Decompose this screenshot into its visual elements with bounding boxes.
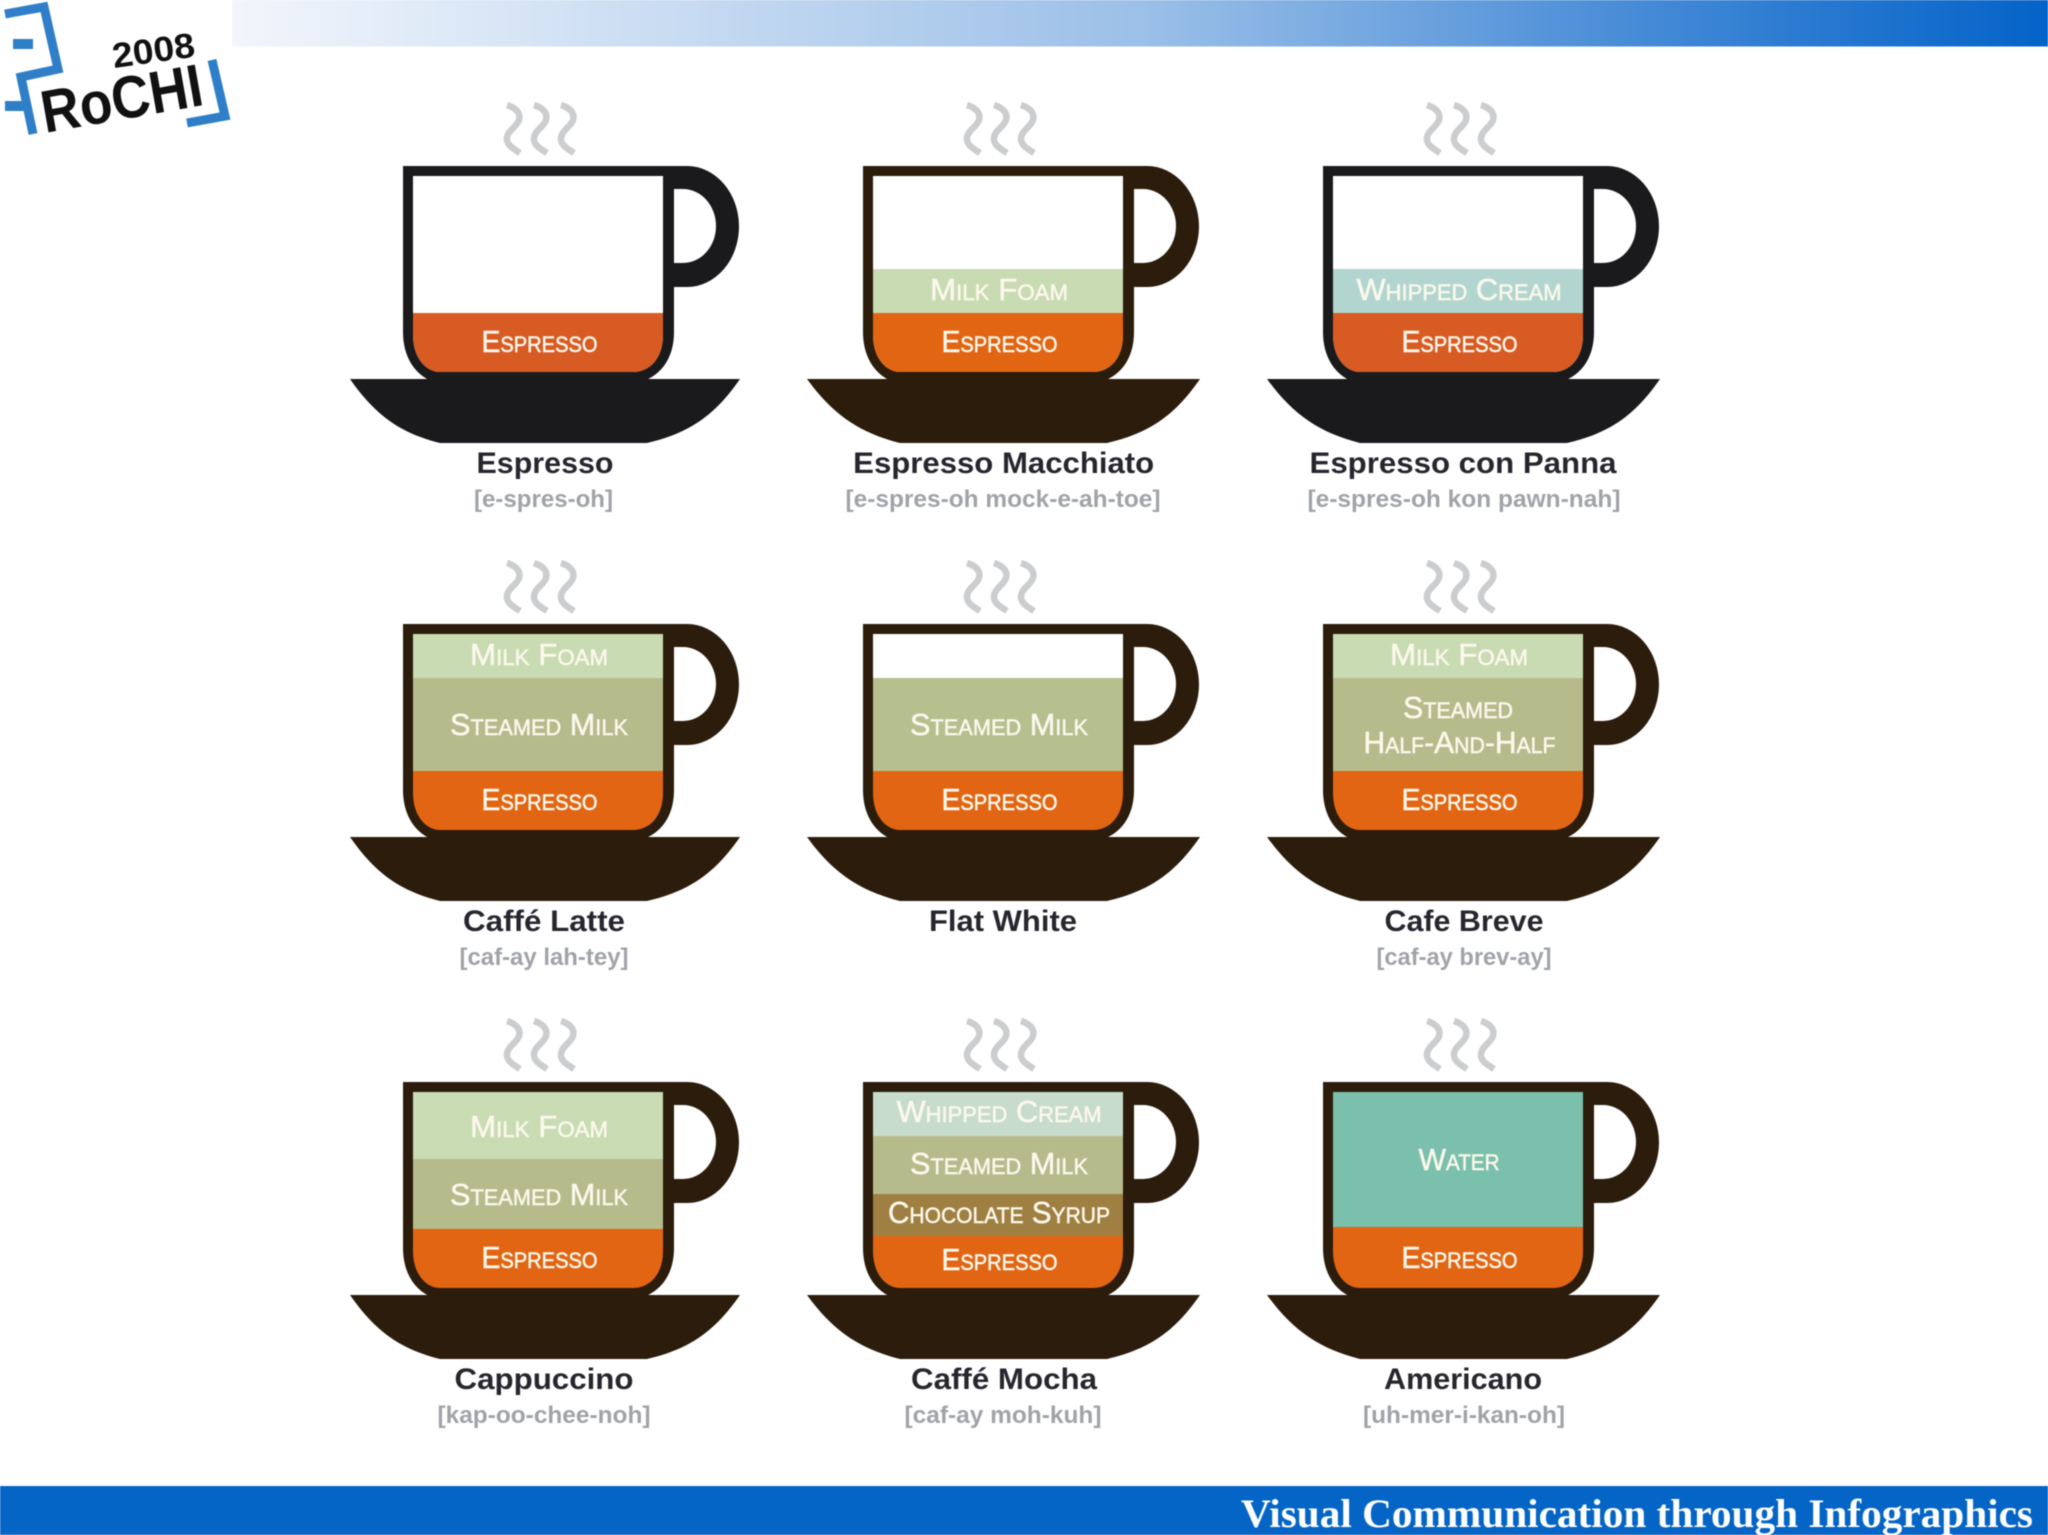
drink: Caffé Latte (350, 563, 740, 971)
label: whipped cream layer: Whipped Cream (1356, 272, 1562, 307)
drink name: Cafe Breve (1384, 905, 1544, 938)
label: steamed milk layer: Steamed Milk (910, 1146, 1088, 1181)
logo: RoCHI 2008: RoCHI (36, 52, 208, 146)
label: milk foam layer: Milk Foam (470, 1109, 608, 1144)
drink name: Caffé Mocha (911, 1363, 1097, 1396)
drink: Cappuccino (350, 1021, 740, 1429)
icon: steam (507, 1021, 574, 1069)
drink: Espresso (350, 105, 740, 513)
icon: cup and saucer (807, 166, 1200, 443)
icon: steam (1427, 105, 1494, 153)
drink: Flat White (807, 563, 1200, 938)
pronunciation: [caf-ay brev-ay] (1376, 944, 1552, 971)
icon: steam (1427, 563, 1494, 611)
icon: cup and saucer (350, 1082, 740, 1359)
icon: cup and saucer (1267, 624, 1660, 901)
cup contents (873, 634, 1123, 831)
logo: RoCHI 2008: 2008 (110, 26, 197, 76)
cup contents (1333, 634, 1583, 831)
label: milk foam layer: Milk Foam (470, 637, 608, 672)
footer title: Visual Communication through Infographics (1241, 1491, 2033, 1535)
drink: Caffé Mocha (807, 1021, 1200, 1429)
drink name: Espresso (476, 447, 614, 480)
drink name: Caffé Latte (463, 905, 625, 938)
label: steamed milk layer: Steamed Milk (450, 707, 628, 742)
label: espresso layer: Espresso (482, 782, 598, 817)
icon: cup and saucer (350, 624, 740, 901)
drink name: Cappuccino (454, 1363, 634, 1396)
drink name: Espresso con Panna (1310, 447, 1617, 480)
cup contents (873, 1092, 1123, 1289)
drink: Espresso Macchiato (807, 105, 1200, 513)
label: steamed half-and-half layer: Steamed (1403, 690, 1513, 725)
pronunciation: [kap-oo-chee-noh] (438, 1402, 650, 1429)
icon: cup and saucer (350, 166, 740, 443)
footer bar (0, 1486, 2048, 1535)
icon: steam (1427, 1021, 1494, 1069)
pronunciation: [e-spres-oh kon pawn-nah] (1308, 486, 1620, 513)
pronunciation: [e-spres-oh mock-e-ah-toe] (846, 486, 1160, 513)
drink name: Flat White (929, 905, 1077, 938)
cup contents (413, 1092, 663, 1289)
drink: Cafe Breve (1267, 563, 1660, 971)
icon: steam (507, 563, 574, 611)
label: steamed milk layer: Steamed Milk (450, 1177, 628, 1212)
label: espresso layer: Espresso (942, 1242, 1058, 1277)
drink name: Espresso Macchiato (853, 447, 1154, 480)
label: milk foam layer: Milk Foam (1390, 637, 1528, 672)
drink: Espresso con Panna (1267, 105, 1660, 513)
pronunciation: [caf-ay lah-tey] (460, 944, 628, 971)
label: espresso layer: Espresso (942, 324, 1058, 359)
label: steamed half-and-half layer: Half-And-Half (1364, 725, 1556, 760)
cup contents (1333, 1092, 1583, 1289)
cup contents (413, 634, 663, 831)
label: chocolate syrup layer: Chocolate Syrup (888, 1195, 1110, 1230)
icon: cup and saucer (1267, 1082, 1660, 1359)
icon: steam (507, 105, 574, 153)
icon: cup and saucer (807, 1082, 1200, 1359)
pronunciation: [uh-mer-i-kan-oh] (1363, 1402, 1565, 1429)
label: espresso layer: Espresso (482, 1240, 598, 1275)
label: steamed milk layer: Steamed Milk (910, 707, 1088, 742)
label: espresso layer: Espresso (942, 782, 1058, 817)
label: espresso layer: Espresso (1402, 324, 1518, 359)
drink name: Americano (1384, 1363, 1542, 1396)
icon: steam (967, 1021, 1034, 1069)
label: espresso layer: Espresso (482, 324, 598, 359)
cup contents (413, 176, 663, 373)
pronunciation: [e-spres-oh] (474, 486, 613, 513)
icon: steam (967, 105, 1034, 153)
label: espresso layer: Espresso (1402, 1240, 1518, 1275)
label: steamed half-and-half layer (1364, 690, 1556, 760)
header gradient bar (232, 0, 2048, 46)
label: water layer: Water (1418, 1142, 1500, 1177)
icon: cup and saucer (807, 624, 1200, 901)
label: espresso layer: Espresso (1402, 782, 1518, 817)
icon: cup and saucer (1267, 166, 1660, 443)
logo: RoCHI 2008 (5, 7, 225, 146)
pronunciation: [caf-ay moh-kuh] (904, 1402, 1102, 1429)
drink: Americano (1267, 1021, 1660, 1429)
cup contents (873, 176, 1123, 373)
label: whipped cream layer: Whipped Cream (896, 1094, 1102, 1129)
label: milk foam layer: Milk Foam (930, 272, 1068, 307)
cup contents (1333, 176, 1583, 373)
icon: steam (967, 563, 1034, 611)
